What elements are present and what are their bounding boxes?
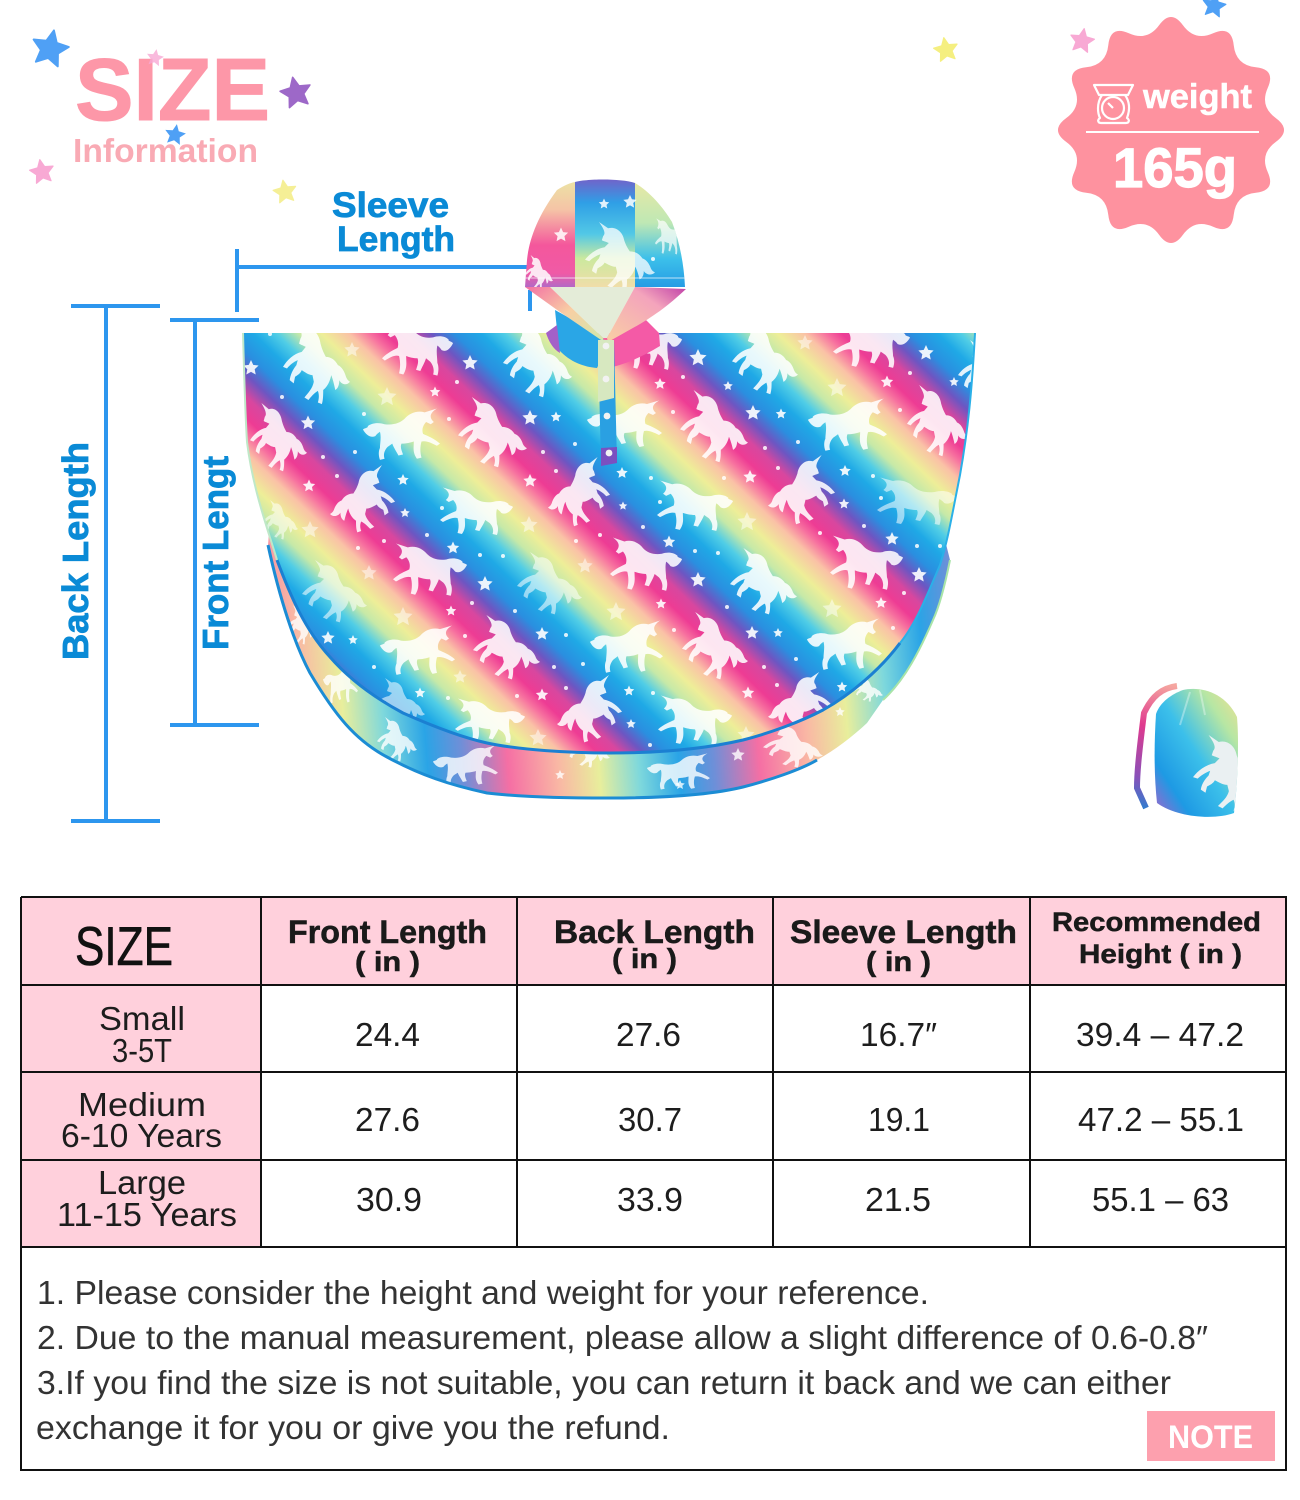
- row: medium: [61, 1086, 1244, 1154]
- row: medium: 6-10 Years: [61, 1117, 222, 1154]
- hood shell: [525, 180, 685, 287]
- dimension: sleeve length: Sleeve: [332, 186, 449, 225]
- header row: Back Length: [554, 914, 755, 950]
- icon: kitchen scale: [1094, 85, 1133, 123]
- row: large: 33.9: [617, 1181, 683, 1218]
- header row: Sleeve Length: [790, 914, 1017, 950]
- row: small: 16.7″: [860, 1016, 937, 1053]
- row: medium: Medium: [78, 1086, 206, 1123]
- hood: [520, 178, 690, 466]
- badge: weight 165g: [1058, 17, 1284, 243]
- header row: ( in ): [612, 943, 677, 974]
- bag strap: [1137, 686, 1177, 808]
- poncho front layer: [243, 317, 1018, 753]
- decorative stars: [28, 0, 1227, 204]
- row: medium: 27.6: [355, 1101, 420, 1138]
- label: weight: weight: [1142, 78, 1252, 116]
- unicorn print: [243, 317, 1018, 745]
- header row: Height ( in ): [1079, 939, 1242, 969]
- header row: ( in ): [866, 946, 931, 977]
- poncho illustration: [243, 178, 1018, 798]
- row: large: 11-15 Years: [57, 1196, 237, 1233]
- storage bag illustration: [1134, 683, 1238, 817]
- row: large: 21.5: [865, 1181, 931, 1218]
- white unicorns: [250, 317, 1018, 745]
- notes: exchange it for you or give you the refund.: [36, 1409, 670, 1446]
- bag fold: [1180, 690, 1205, 725]
- row: large: 30.9: [356, 1181, 422, 1218]
- hood lining: [550, 287, 635, 338]
- notes: [36, 1274, 1208, 1446]
- row: large: [57, 1164, 1229, 1233]
- hood left panel: [525, 182, 575, 287]
- header row: Recommended: [1052, 907, 1261, 937]
- row: medium: 47.2 – 55.1: [1078, 1101, 1244, 1138]
- row: small: 39.4 – 47.2: [1076, 1016, 1244, 1053]
- dimension: back length: Back Length: [55, 442, 96, 660]
- dimension: sleeve length: Length: [337, 220, 455, 259]
- value: 165g: 165g: [1113, 136, 1237, 199]
- subtitle: Information: Information: [73, 132, 258, 169]
- size table: [21, 897, 1286, 1471]
- header row: [75, 907, 1261, 977]
- hood right panel: [635, 183, 685, 287]
- hood print: [525, 195, 683, 291]
- dimension: front length: [170, 320, 259, 725]
- notes: 1. Please consider the height and weight for your reference.: [37, 1274, 929, 1311]
- note tag: NOTE: [1168, 1419, 1253, 1455]
- row: small: 27.6: [616, 1016, 681, 1053]
- poncho back layer: [268, 520, 950, 798]
- pink header cells: [21, 897, 1286, 1247]
- dimension: front length: Front Lengt: [195, 456, 236, 650]
- row: small: 3-5T: [112, 1032, 172, 1069]
- title: SIZE: SIZE: [75, 40, 270, 139]
- faint unicorns: [263, 478, 957, 728]
- scalloped badge shape: [1058, 17, 1284, 243]
- neck panel: [555, 310, 608, 368]
- left collar flap: [525, 287, 604, 342]
- row: large: Large: [98, 1164, 186, 1201]
- placket with snaps: [598, 340, 617, 466]
- row: small: [99, 1000, 1244, 1069]
- header row: ( in ): [355, 946, 420, 977]
- print stars: [243, 345, 959, 728]
- row: large: 55.1 – 63: [1092, 1181, 1229, 1218]
- print dots: [270, 334, 940, 745]
- row: small: 24.4: [355, 1016, 420, 1053]
- print faint stars: [301, 335, 846, 745]
- notes: 2. Due to the manual measurement, please allow a slight difference of 0.6-0.8″: [37, 1319, 1208, 1356]
- title block: SIZE Information: [73, 40, 270, 169]
- right collar flap: [607, 287, 686, 342]
- hood centre panel: [575, 178, 635, 290]
- header row: SIZE: [75, 915, 173, 977]
- row: medium: 30.7: [618, 1101, 682, 1138]
- bag unicorn: [1193, 735, 1238, 811]
- dimension: sleeve length: [235, 186, 530, 312]
- dimension: back length: [55, 306, 160, 821]
- note tag: [1147, 1411, 1275, 1461]
- notes: 3.If you find the size is not suitable, you can return it back and we can either: [37, 1364, 1171, 1401]
- table grid: [21, 897, 1286, 1471]
- header row: Front Length: [288, 914, 487, 950]
- row: medium: 19.1: [868, 1101, 930, 1138]
- bag body: [1155, 689, 1238, 817]
- row: small: Small: [99, 1000, 185, 1037]
